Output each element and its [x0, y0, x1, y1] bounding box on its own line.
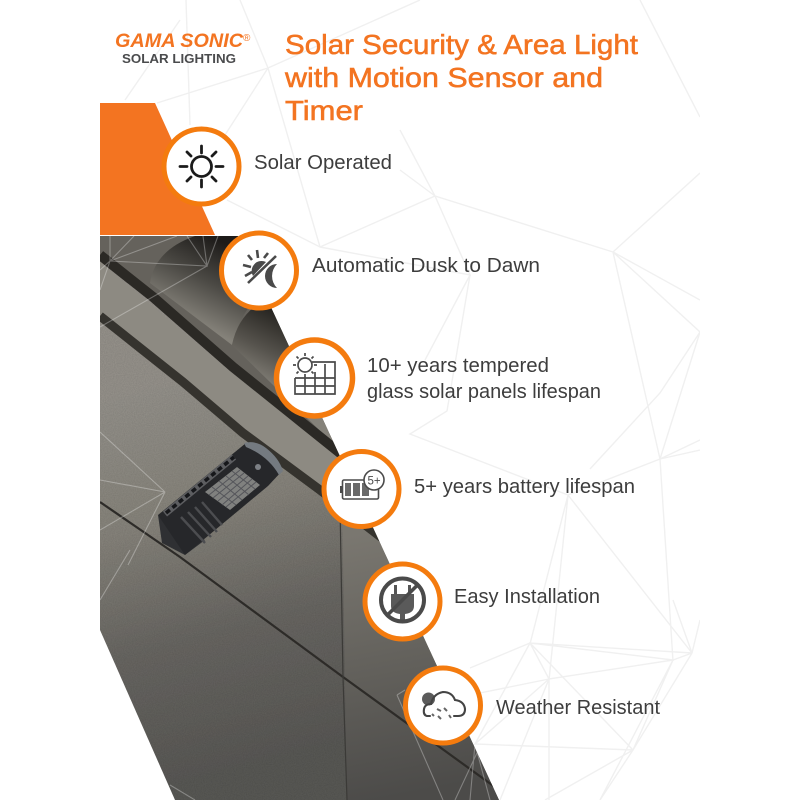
badge circle [276, 340, 352, 416]
label: glass solar panels lifespan [367, 381, 601, 403]
icon: sun [180, 146, 223, 187]
logo [115, 31, 251, 66]
title [284, 29, 638, 126]
label: Solar Operated [254, 152, 392, 174]
LED array [205, 467, 260, 510]
logo registered mark: ® [243, 33, 251, 44]
soffit arch panel two [232, 308, 335, 445]
badge circle [406, 668, 480, 743]
badge circle [222, 233, 296, 308]
badge circle [365, 564, 440, 639]
concrete wall [100, 236, 500, 800]
fins [181, 502, 222, 543]
LED grid [209, 470, 256, 507]
shadow beam lower [100, 316, 395, 548]
product: solar light fixture [158, 442, 283, 555]
fixture top cap [244, 442, 283, 475]
title: Timer [285, 95, 363, 126]
icon: battery with badge [340, 470, 384, 499]
feature: solar operated [164, 129, 392, 204]
logo wordmark: GAMA SONIC [115, 31, 243, 52]
icon: cloud with rain [422, 692, 465, 719]
network lines over photo [100, 236, 490, 800]
icon: solar panel with sun [293, 353, 335, 394]
feature: weather resistant [406, 668, 660, 743]
badge circle [164, 129, 239, 204]
vents holes [166, 457, 234, 513]
label: 10+ years tempered [367, 355, 549, 377]
label [367, 355, 601, 403]
title: Solar Security & Area Light [285, 29, 638, 60]
orange accent shape [100, 103, 215, 235]
label: Weather Resistant [496, 697, 660, 719]
feature: easy installation [365, 564, 600, 639]
soffit base [100, 236, 340, 455]
icon: no plug [381, 578, 424, 622]
logo subline: SOLAR LIGHTING [122, 51, 236, 66]
icon: sun and moon [243, 250, 277, 288]
icon: battery with badge: 5+ [367, 476, 381, 488]
upper ledge [162, 314, 378, 539]
photo: product mounted on concrete wall [100, 236, 500, 800]
fixture bracket [158, 515, 205, 555]
label: 5+ years battery lifespan [414, 476, 635, 498]
title: with Motion Sensor and [284, 62, 603, 93]
label: Easy Installation [454, 586, 600, 608]
label: Automatic Dusk to Dawn [312, 255, 540, 277]
wall joint diagonal [100, 502, 499, 790]
vents strip [165, 457, 234, 514]
right wall panel [342, 525, 499, 800]
wall joint vertical [340, 505, 347, 800]
feature: battery lifespan [324, 452, 635, 526]
motion sensor [255, 464, 261, 470]
badge circle [324, 452, 399, 526]
geometric network line pattern [125, 0, 700, 800]
fixture body [158, 443, 282, 555]
feature: automatic dusk to dawn [222, 233, 540, 308]
shadow beam upper [100, 251, 340, 458]
feature: solar panel lifespan [276, 340, 601, 416]
soffit arch panel one [150, 236, 248, 345]
